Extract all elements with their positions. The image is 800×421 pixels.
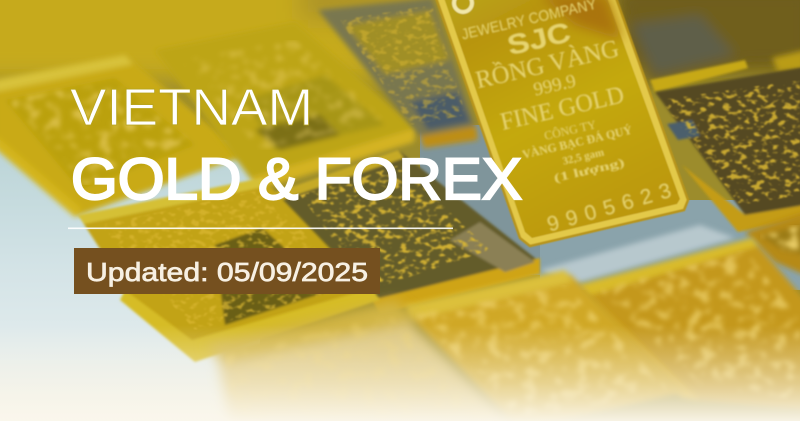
gold bar: right upper rim xyxy=(650,50,800,92)
bar stamp text: 9905623 xyxy=(545,179,674,236)
bar stamp text: RỒNG VÀNG xyxy=(473,33,621,94)
gold bar: top centre, bluish xyxy=(318,0,478,148)
stamped marks: right middle bar xyxy=(660,80,800,205)
title: GOLD & FOREX: GOLD & FOREX xyxy=(71,147,522,212)
bar stamp text: SJC xyxy=(504,16,574,61)
stamped marks: lower right bar xyxy=(600,250,800,400)
bar stamp text: 32,5 gam xyxy=(561,146,605,168)
bar stamp text: (1 lượng) xyxy=(552,155,626,185)
gold bar: right middle xyxy=(655,67,800,232)
title: VIETNAM: VIETNAM xyxy=(70,79,313,137)
gold bar: lower right xyxy=(578,238,800,410)
table surface xyxy=(0,125,800,421)
bar stamp text xyxy=(460,0,674,236)
divider line xyxy=(68,228,453,229)
bar stamp text: FINE GOLD xyxy=(498,81,627,136)
stamped marks: lower middle bar xyxy=(415,285,670,420)
date badge xyxy=(74,248,380,294)
gold bar: lower left xyxy=(78,178,380,362)
stamped marks: top left bar xyxy=(8,80,190,185)
gold bar: top middle xyxy=(155,22,416,190)
gold bar: top left xyxy=(0,55,246,217)
gold bar: lower left blurred xyxy=(205,300,515,421)
bar stamp text: VÀNG BẠC ĐÁ QUÝ xyxy=(521,123,634,162)
stamped marks: right small bar xyxy=(760,225,800,255)
bar stamp text: CÔNG TY xyxy=(543,117,598,143)
gold bar: right small xyxy=(745,212,800,275)
stamped marks: lower left blurred bar xyxy=(225,315,500,420)
gold bar: centre dark xyxy=(268,150,540,314)
stamped marks: top centre bar xyxy=(340,5,466,125)
gold bars: far blurred row xyxy=(0,0,800,80)
gold bar: lower middle xyxy=(405,270,685,421)
gold bar: right upper xyxy=(620,0,800,85)
gold bar: main SJC bar xyxy=(435,0,688,246)
stamped marks: lower left bar xyxy=(100,190,360,330)
soft light overlay at bottom xyxy=(0,325,800,421)
stamped marks: top middle bar xyxy=(180,40,385,150)
date text: Updated: 05/09/2025 xyxy=(86,257,368,287)
stamped marks: centre dark bar xyxy=(300,165,490,290)
bar stamp text: 999.9 xyxy=(532,71,578,101)
